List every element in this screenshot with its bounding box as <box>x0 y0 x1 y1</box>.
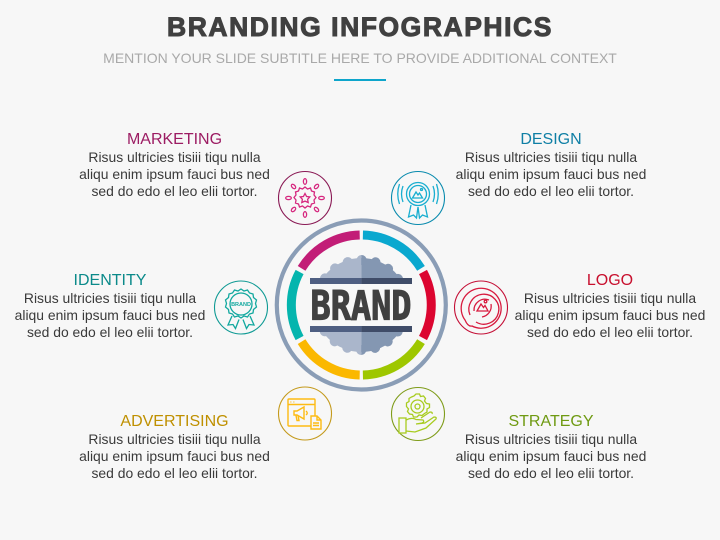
text block: identity <box>15 272 205 340</box>
brand wordmark: BRAND <box>310 284 412 330</box>
body: design: sed do edo el leo elii tortor. <box>468 183 634 199</box>
icon: marketing sun gear <box>278 172 332 224</box>
body: marketing: Risus ultricies tisiii tiqu nulla <box>88 149 261 165</box>
icon: strategy hand gear <box>392 388 444 440</box>
body: strategy <box>456 431 646 481</box>
body: design: Risus ultricies tisiii tiqu nulla <box>465 149 637 165</box>
body: advertising: sed do edo el leo elii tortor. <box>91 465 258 481</box>
text block: marketing <box>79 131 270 199</box>
body: identity: aliqu enim ipsum fauci bus ned <box>15 307 205 323</box>
icon: identity brand rosette: BRAND <box>231 302 251 308</box>
body: strategy: sed do edo el leo elii tortor. <box>468 465 634 481</box>
body: advertising: Risus ultricies tisiii tiqu nulla <box>88 431 261 447</box>
body: marketing: sed do edo el leo elii tortor. <box>91 183 258 199</box>
body: identity <box>15 290 205 340</box>
body: logo: sed do edo el leo elii tortor. <box>527 324 693 340</box>
body: identity: Risus ultricies tisiii tiqu nulla <box>24 290 196 306</box>
body: logo: aliqu enim ipsum fauci bus ned <box>515 307 705 323</box>
body: identity: sed do edo el leo elii tortor. <box>27 324 193 340</box>
outer ring <box>277 220 446 390</box>
heading: advertising: ADVERTISING <box>120 413 229 430</box>
icon: advertising browser megaphone <box>278 387 332 440</box>
badge bars <box>310 278 412 332</box>
body: logo <box>515 290 705 340</box>
body: logo: Risus ultricies tisiii tiqu nulla <box>524 290 696 306</box>
central brand emblem <box>277 220 446 390</box>
heading: logo: LOGO <box>587 272 633 289</box>
segment arcs <box>291 235 431 375</box>
heading: marketing: MARKETING <box>127 131 222 148</box>
icon: identity brand rosette <box>214 281 268 334</box>
scalloped badge <box>320 255 403 355</box>
subtitle: MENTION YOUR SLIDE SUBTITLE HERE TO PROVIDE ADDITIONAL CONTEXT <box>103 50 617 66</box>
title accent line <box>334 79 386 81</box>
icon: logo circular mark <box>454 281 508 334</box>
body: strategy: aliqu enim ipsum fauci bus ned <box>456 448 646 464</box>
text block: logo <box>515 272 705 340</box>
body: design: aliqu enim ipsum fauci bus ned <box>456 166 646 182</box>
heading: strategy: STRATEGY <box>508 413 594 430</box>
heading: design: DESIGN <box>520 131 582 148</box>
title: BRANDING INFOGRAPHICS <box>167 12 553 42</box>
body: advertising: aliqu enim ipsum fauci bus ned <box>79 448 270 464</box>
body: advertising <box>79 431 270 481</box>
heading: identity: IDENTITY <box>74 272 146 289</box>
text block: advertising <box>79 413 270 481</box>
body: design <box>456 149 646 199</box>
icon: design award ribbon <box>392 172 444 224</box>
body: marketing: aliqu enim ipsum fauci bus ned <box>79 166 270 182</box>
body: marketing <box>79 149 270 199</box>
body: strategy: Risus ultricies tisiii tiqu nulla <box>465 431 637 447</box>
text block: strategy <box>456 413 646 481</box>
text block: design <box>456 131 646 199</box>
